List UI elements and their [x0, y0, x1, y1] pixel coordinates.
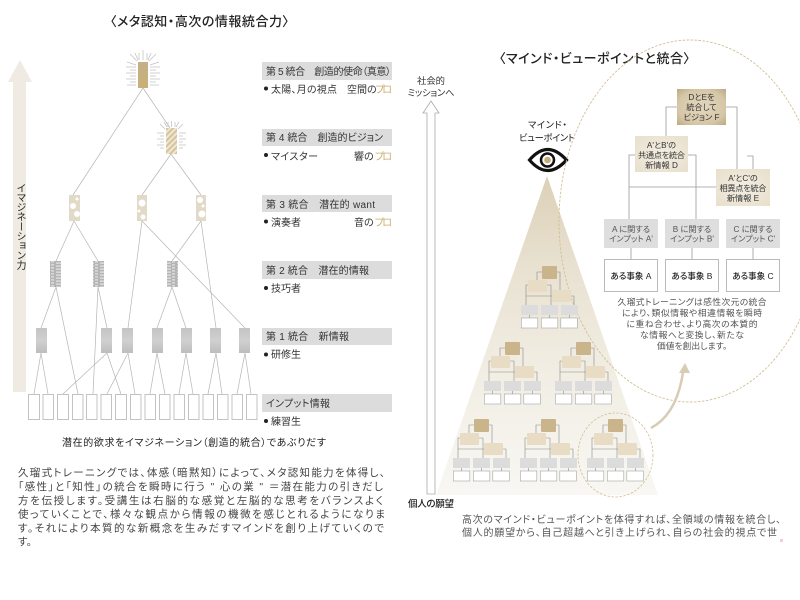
- level label: 5: 空間の: [347, 84, 377, 96]
- box: input B: インプット B': [670, 234, 714, 244]
- box: new info D: 共通点を統合: [638, 150, 685, 160]
- level label: input: 練習生: [271, 415, 301, 428]
- caption: left diagram: 潜在的欲求をイマジネーション（創造的統合）であぶりだす: [62, 436, 326, 449]
- box: new info D: 新情報 D: [645, 160, 678, 170]
- label: social mission: ミッションへ: [408, 88, 454, 98]
- text block: ellipse paragraph: 久瑠式トレーニングは感性次元の統合: [618, 296, 767, 307]
- text block: left paragraph: 方を伝授します。受講生は右脳的な感覚と左脳的な思考をバランスよく: [18, 494, 383, 507]
- box: new info D: [635, 136, 688, 172]
- text block: left paragraph: 久瑠式トレーニングでは、体感（暗黙知）によって、メタ認知能力を体得し、: [18, 466, 385, 479]
- box: new info E: 新情報 E: [727, 193, 760, 203]
- level label: 5: プロ: [376, 84, 392, 96]
- text block: left paragraph: 使っていくことで、様々な観点から情報の機微を感じとれるようになりま: [18, 508, 385, 520]
- level label: input: インプット情報: [266, 397, 330, 410]
- level label: 3: 音の: [354, 216, 374, 229]
- level label: 4: マイスター: [271, 151, 318, 163]
- level label: 3: 演奏者: [271, 216, 301, 229]
- small tree 3: [555, 342, 612, 404]
- text block: left paragraph: す。: [18, 536, 32, 548]
- level label: 1: [262, 328, 392, 361]
- dashed circle: highlighted tree: [578, 413, 653, 497]
- box: vision F: DとEを: [688, 93, 715, 102]
- level label: 2: [262, 261, 392, 295]
- text block: ellipse paragraph: [618, 296, 767, 351]
- label: social mission: [408, 75, 454, 98]
- box: input A: [604, 219, 658, 248]
- small tree 1: [521, 266, 578, 328]
- row: input boxes: [28, 394, 257, 420]
- small tree 5: [520, 419, 577, 481]
- icon: eye: [530, 150, 566, 170]
- text block: ellipse paragraph: に重ね合わせ、より高次の本質的: [626, 318, 758, 329]
- level label: 2: 第 2 統合 潜在的情報: [266, 264, 369, 277]
- box: event B: ある事象 B: [671, 271, 713, 281]
- box: event C: ある事象 C: [732, 271, 774, 281]
- box: vision F: [677, 89, 726, 125]
- box: event A: [604, 260, 658, 292]
- text block: ellipse paragraph: により、類似情報や相違情報を瞬時: [622, 307, 762, 318]
- icon: radiant second node: [157, 121, 186, 154]
- box: input A: A に関する: [612, 225, 650, 234]
- level label: 1: 第 1 統合 新情報: [266, 330, 349, 343]
- page marker dot: [780, 539, 783, 542]
- title: meta cognition: 〈メタ認知・高次の情報統合力〉: [110, 14, 289, 29]
- box: input C: インプット C': [731, 234, 776, 244]
- text block: ellipse paragraph: 価値を創出します。: [657, 340, 727, 351]
- dashed ellipse: zoom lens: [559, 40, 800, 402]
- box: new info E: A'とC'の: [728, 174, 758, 183]
- label: imagination power: イマジネーション力: [14, 183, 26, 271]
- label: personal desire: 個人の願望: [408, 498, 454, 510]
- connectors: [629, 107, 753, 259]
- connector lines: [34, 88, 251, 394]
- box: event B: [666, 260, 718, 292]
- box: new info E: 相異点を統合: [720, 183, 766, 193]
- level label: input: [262, 394, 392, 428]
- box: vision F: 統合して: [686, 102, 717, 112]
- small tree 2: [484, 342, 541, 404]
- small tree 6: [587, 419, 644, 481]
- text block: left paragraph: す。それにより本質的な新概念を生みだすマインドを創り上げていくので: [18, 522, 384, 534]
- text block: left paragraph: 「感性」と「知性」の統合を瞬時に行う " 心の業 " ＝潜在能力の引きだし: [18, 480, 383, 493]
- level label: 4: 響の: [354, 150, 374, 163]
- row: level 2 nodes: [50, 261, 178, 287]
- box: event C: [726, 260, 780, 292]
- box: input C: C に関する: [733, 225, 773, 234]
- level label: 3: プロ: [375, 217, 392, 229]
- box: input A: インプット A': [609, 234, 653, 244]
- level label: 4: 第 4 統合 創造的ビジョン: [266, 131, 384, 144]
- box: event A: ある事象 A: [610, 271, 652, 281]
- text block: bottom right paragraph: [462, 513, 781, 539]
- box: new info D: A'とB'の: [647, 141, 676, 150]
- box: vision F: ビジョン F: [683, 113, 720, 122]
- box: input B: B に関する: [673, 225, 711, 234]
- level label: 4: [262, 129, 392, 163]
- pyramid: [436, 176, 658, 495]
- arrow: imagination: [8, 60, 32, 392]
- label: mind viewpoint: マインド・: [527, 120, 567, 130]
- box: new info E: [716, 169, 770, 206]
- row: level 1 nodes: [36, 328, 250, 353]
- icon: radiant top node: [126, 50, 160, 88]
- title: mind viewpoint: 〈マインド・ビューポイントと統合〉: [499, 51, 690, 66]
- small tree 4: [453, 419, 510, 481]
- box: input B: [665, 219, 719, 248]
- level label: 1: 研修生: [271, 348, 301, 361]
- row: level 3 nodes: [69, 195, 206, 221]
- level label: 4: プロ: [375, 151, 392, 163]
- curved arrow: [651, 363, 690, 428]
- text block: ellipse paragraph: な情報へと変換し、新たな: [640, 329, 744, 340]
- level label: 5: 太陽、月の視点: [271, 83, 337, 96]
- panel: hierarchy tree: [28, 50, 257, 420]
- label: social mission: 社会的: [417, 75, 445, 86]
- panel: integration flow: [604, 89, 780, 292]
- level label: 3: 第 3 統合 潜在的 want: [266, 198, 375, 211]
- text block: bottom right paragraph: 個人的願望から、自己超越へと引き上げられ、自らの社会的視点で世: [462, 526, 777, 539]
- level label: 3: [262, 195, 392, 229]
- label: mind viewpoint: [519, 120, 575, 143]
- text block: bottom right paragraph: 高次のマインド・ビューポイントを体得すれば、全領域の情報を統合し、: [462, 513, 781, 526]
- level label: 5: [262, 62, 392, 96]
- text block: left paragraph: [18, 466, 385, 548]
- label: mind viewpoint: ビューポイント: [519, 133, 575, 143]
- arrow: personal to social: [423, 101, 439, 494]
- level label: 2: 技巧者: [271, 282, 301, 295]
- level label: 5: 第 5 統合 創造的使命（真意）: [266, 65, 391, 78]
- box: input C: [726, 219, 780, 248]
